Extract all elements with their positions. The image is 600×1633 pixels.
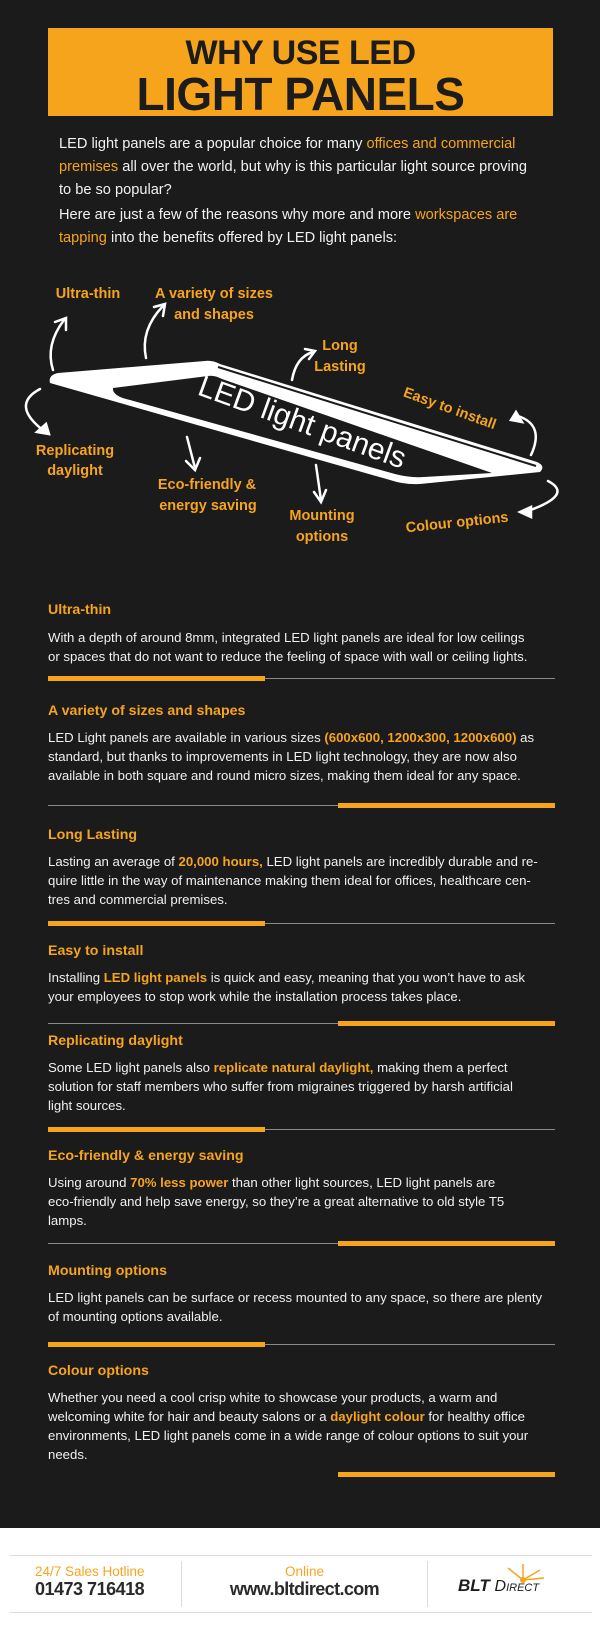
text	[48, 1390, 528, 1462]
intro paragraph 2: Here are just a few of the reasons why more and more workspaces are	[59, 207, 517, 223]
section: ultra-thin	[48, 602, 527, 664]
labels: Replicating	[36, 443, 114, 459]
text	[48, 1290, 542, 1324]
labels: Ultra-thin	[56, 286, 120, 302]
text	[48, 730, 534, 783]
section: eco-friendly	[48, 1148, 504, 1228]
text	[48, 1175, 504, 1228]
text: Installing LED light panels is quick and easy, meaning that you won’t have to ask	[48, 970, 525, 985]
labels: Easy to install	[401, 385, 498, 433]
panel shape	[50, 361, 542, 484]
labels: daylight	[47, 463, 103, 479]
section: easy to install	[48, 943, 525, 1004]
hotline	[35, 1564, 145, 1599]
logo: BLT DIRECT	[458, 1576, 539, 1595]
text	[48, 1060, 513, 1113]
text	[48, 854, 538, 907]
online: Online	[285, 1564, 324, 1579]
online: www.bltdirect.com	[230, 1579, 379, 1599]
text: LED Light panels are available in various sizes (600x600, 1200x300, 1200x600) as	[48, 730, 534, 745]
labels: Long	[322, 338, 358, 354]
section: replicating daylight	[48, 1033, 513, 1113]
text: Whether you need a cool crisp white to showcase your products, a warm and	[48, 1390, 497, 1405]
labels: options	[296, 529, 348, 545]
text: your employees to stop work while the installation process takes place.	[48, 989, 461, 1004]
title	[48, 28, 553, 116]
hotline: 01473 716418	[35, 1579, 144, 1599]
heading: Ultra-thin	[48, 602, 111, 618]
text: or spaces that do not want to reduce the feeling of space with wall or ceiling lights.	[48, 649, 527, 664]
labels: Lasting	[314, 359, 366, 375]
intro paragraph 2: tapping into the benefits offered by LED light panels:	[59, 230, 397, 246]
logo	[458, 1564, 544, 1595]
text: eco-friendly and help save energy, so they’re a great alternative to old style T5	[48, 1194, 504, 1209]
text: Lasting an average of 20,000 hours, LED light panels are incredibly durable and re-	[48, 854, 538, 869]
labels: A variety of sizes	[155, 286, 273, 302]
diagram	[24, 286, 559, 545]
intro paragraph 1	[59, 136, 527, 198]
heading: A variety of sizes and shapes	[48, 703, 245, 719]
heading: Mounting options	[48, 1263, 167, 1279]
text: welcoming white for hair and beauty salons or a daylight colour for healthy office	[48, 1409, 525, 1424]
text: environments, LED light panels come in a wide range of colour options to suit your	[48, 1428, 528, 1443]
text: LED light panels can be surface or recess mounted to any space, so there are plenty	[48, 1290, 542, 1305]
heading: Long Lasting	[48, 827, 137, 843]
section: colour options	[48, 1363, 528, 1462]
labels: energy saving	[159, 498, 257, 514]
section: mounting	[48, 1263, 542, 1324]
arrows	[26, 304, 557, 517]
heading: Easy to install	[48, 943, 143, 959]
text	[48, 630, 527, 664]
heading: Replicating daylight	[48, 1033, 183, 1049]
text: needs.	[48, 1447, 88, 1462]
labels: Eco-friendly &	[158, 477, 257, 493]
text	[48, 970, 525, 1004]
labels	[36, 286, 509, 545]
footer	[0, 1528, 600, 1633]
text: tres and commercial premises.	[48, 892, 228, 907]
intro paragraph 2	[59, 207, 517, 246]
text: standard, but thanks to improvements in LED light technology, they are now also	[48, 749, 517, 764]
intro paragraph 1: LED light panels are a popular choice for many offices and commercial	[59, 136, 515, 152]
intro paragraph 1: to be so popular?	[59, 182, 172, 198]
text: lamps.	[48, 1213, 87, 1228]
title: LIGHT PANELS	[137, 68, 464, 120]
section: long lasting	[48, 827, 538, 907]
intro paragraph 1: premises all over the world, but why is this particular light source proving	[59, 159, 527, 175]
heading: Eco-friendly & energy saving	[48, 1148, 244, 1164]
labels: Mounting	[289, 508, 355, 524]
text: With a depth of around 8mm, integrated LED light panels are ideal for low ceilings	[48, 630, 524, 645]
online	[230, 1564, 379, 1599]
text: available in both square and round micro sizes, making them ideal for any space.	[48, 768, 521, 783]
text: Some LED light panels also replicate natural daylight, making them a perfect	[48, 1060, 508, 1075]
panel label: LED light panels	[194, 370, 410, 475]
text: of mounting options available.	[48, 1309, 222, 1324]
text: quire little in the way of maintenance making them ideal for offices, healthcare cen-	[48, 873, 531, 888]
title: WHY USE LED	[185, 34, 416, 72]
labels: Colour options	[405, 510, 509, 536]
text: solution for staff members who suffer from migraines triggered by harsh artificial	[48, 1079, 513, 1094]
heading: Colour options	[48, 1363, 149, 1379]
text: light sources.	[48, 1098, 126, 1113]
hotline: 24/7 Sales Hotline	[35, 1564, 145, 1579]
labels: and shapes	[174, 307, 254, 323]
section: sizes	[48, 703, 534, 783]
text: Using around 70% less power than other light sources, LED light panels are	[48, 1175, 495, 1190]
